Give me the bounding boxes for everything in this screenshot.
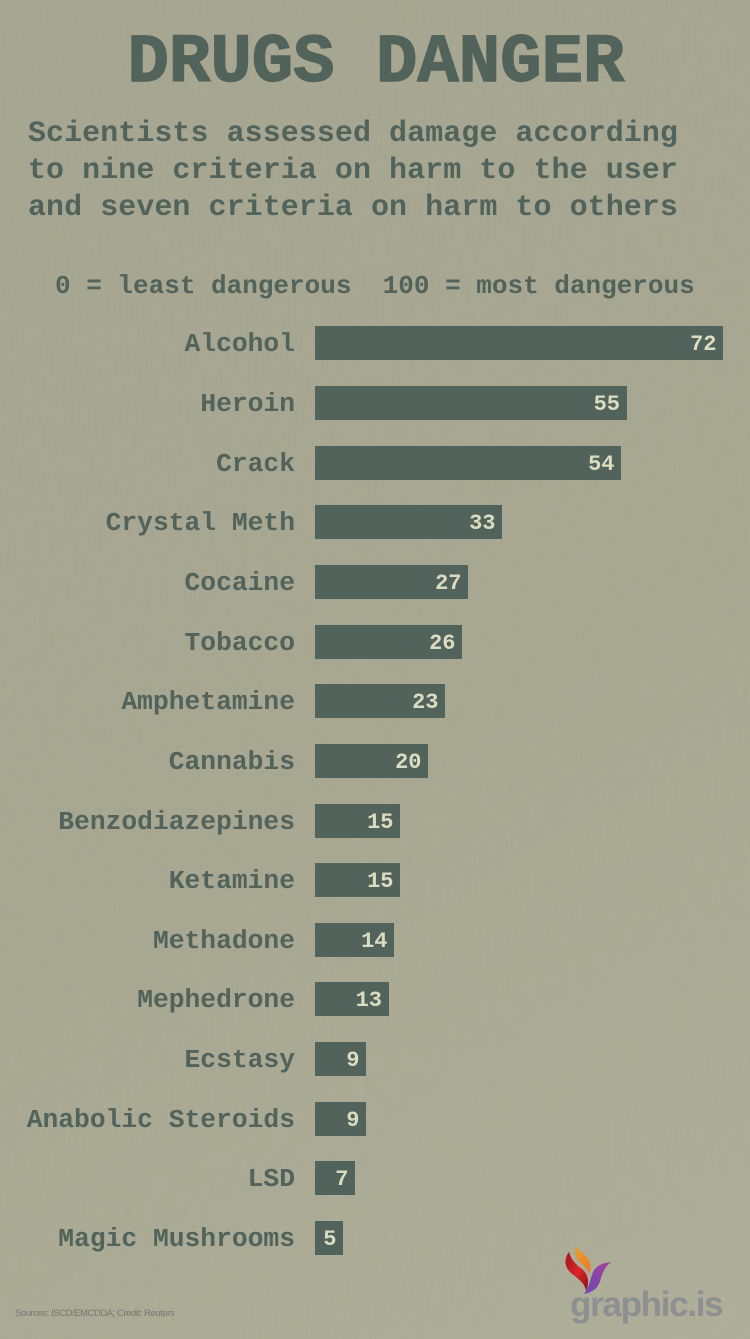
bar: Magic Mushrooms 5: 5 [323,1227,336,1252]
bar: Cannabis 20: 20 [395,750,422,775]
label: Crystal Meth: Crystal Meth [106,508,295,538]
bar: Crack 54: 54 [588,452,614,477]
bar: Cannabis 20 [315,744,428,778]
bar: Crystal Meth 33: 33 [469,511,496,536]
bar: Crystal Meth 33 [315,505,502,539]
scale legend: 0 = least dangerous 100 = most dangerous [55,271,695,301]
icon: flame petals [565,1246,611,1294]
bar: Ecstasy 9: 9 [346,1048,360,1073]
bar: Anabolic Steroids 9: 9 [346,1108,360,1133]
bar: Anabolic Steroids 9 [315,1102,366,1136]
label: Benzodiazepines: Benzodiazepines [58,807,295,837]
logo wordmark: graphic.is [570,1285,722,1324]
bar: Ecstasy 9 [315,1042,366,1076]
bar: Cocaine 27 [315,565,468,599]
bar: LSD 7 [315,1161,355,1195]
label: Amphetamine: Amphetamine [121,687,295,717]
label: Cocaine: Cocaine [185,568,295,598]
bar: Ketamine 15 [315,863,400,897]
bar chart [26,326,723,1255]
bar: Methadone 14: 14 [361,929,388,954]
bar: Magic Mushrooms 5 [315,1221,343,1255]
label: Tobacco: Tobacco [185,628,295,658]
bar: Mephedrone 13: 13 [356,988,382,1013]
subtitle: Scientists assessed damage according [28,117,678,151]
label: Ecstasy: Ecstasy [185,1045,295,1075]
subtitle [28,117,678,225]
label: Mephedrone: Mephedrone [137,985,295,1015]
title: DRUGS DANGER [128,24,624,102]
subtitle: to nine criteria on harm to the user [28,154,678,188]
bar: Amphetamine 23 [315,684,445,718]
label: Crack: Crack [216,449,295,479]
subtitle: and seven criteria on harm to others [28,191,678,225]
bar: Mephedrone 13 [315,982,388,1016]
bar: Heroin 55: 55 [594,392,620,417]
bar: Crack 54 [315,446,621,480]
bar: Methadone 14 [315,923,394,957]
bar: Benzodiazepines 15 [315,804,400,838]
bar: Alcohol 72: 72 [690,332,716,357]
bar: Tobacco 26 [315,625,462,659]
logo: graphic.is [565,1246,722,1324]
bar: Alcohol 72 [315,326,723,360]
label: Ketamine: Ketamine [169,866,295,896]
source credit: Sources: ISCD/EMCDDA; Credit: Reuters [15,1308,174,1319]
label: Magic Mushrooms: Magic Mushrooms [58,1224,295,1254]
label: LSD: LSD [248,1164,295,1194]
label: Anabolic Steroids: Anabolic Steroids [27,1105,295,1135]
bar: Benzodiazepines 15: 15 [367,810,394,835]
label: Alcohol: Alcohol [185,329,295,359]
bar: Heroin 55 [315,386,626,420]
bar: Cocaine 27: 27 [435,571,462,596]
label: Methadone: Methadone [153,926,295,956]
bar: LSD 7: 7 [335,1167,348,1192]
label: Heroin: Heroin [200,389,295,419]
bar: Ketamine 15: 15 [367,869,394,894]
bar: Tobacco 26: 26 [429,631,456,656]
bar: Amphetamine 23: 23 [412,690,438,715]
label: Cannabis: Cannabis [169,747,295,777]
